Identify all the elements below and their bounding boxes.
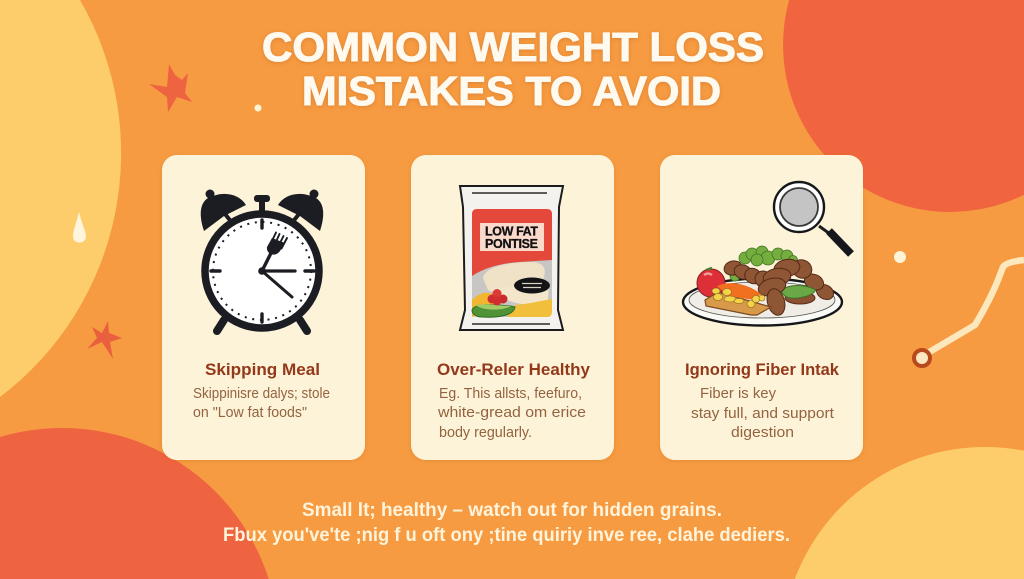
panel: over-relying on healthy foods xyxy=(411,155,614,460)
card background xyxy=(660,155,863,460)
decorative circle: bottom left xyxy=(0,428,269,579)
footer text xyxy=(223,500,790,546)
footer text: Fbux you've'te ;nig f u oft ony ;tine quiriy inve ree, clahe dediers. xyxy=(223,525,790,546)
card body text: Eg. This allsts, feefuro, xyxy=(439,385,582,402)
card heading: Skipping Meal xyxy=(205,361,320,379)
title: MISTAKES TO AVOID xyxy=(302,68,721,114)
icon: plate of food xyxy=(683,246,842,326)
card body text: digestion xyxy=(731,424,794,441)
card body text: Fiber is key xyxy=(700,385,776,402)
card heading: Over-Reler Healthy xyxy=(437,361,591,379)
card background xyxy=(162,155,365,460)
decorative drop xyxy=(73,212,86,243)
card body text: body regularly. xyxy=(439,424,532,441)
card background xyxy=(411,155,614,460)
panel: ignoring fiber intake xyxy=(660,155,863,460)
icon: alarm clock with fork xyxy=(201,190,323,331)
card heading: Ignoring Fiber Intak xyxy=(685,361,840,379)
card body text: stay full, and support xyxy=(691,405,835,422)
card body text xyxy=(691,385,835,441)
footer text: Small lt; healthy – watch out for hidden grains. xyxy=(302,500,722,521)
icon: low fat package: LOW FAT xyxy=(485,224,538,238)
decorative circle: top left xyxy=(0,0,121,397)
decorative star: upper xyxy=(149,64,192,112)
icon: low fat package xyxy=(460,186,563,330)
title xyxy=(262,24,764,114)
decorative line with ring xyxy=(914,260,1024,366)
panel: skipping meals xyxy=(162,155,365,460)
card body text xyxy=(437,385,586,441)
decorative dot: near title xyxy=(254,104,262,112)
decorative circle: top right xyxy=(783,0,1024,212)
icon: low fat package: PONTISE xyxy=(485,237,538,251)
card body text: Skippinisre dalys; stole xyxy=(193,386,330,402)
icon: magnifying glass xyxy=(774,182,851,254)
decorative star: lower xyxy=(87,321,122,359)
card body text: white-gread om erice xyxy=(437,404,586,421)
decorative circle: bottom right xyxy=(795,447,1024,579)
title: COMMON WEIGHT LOSS xyxy=(262,24,764,70)
card body text xyxy=(193,386,330,421)
card body text: on "Low fat foods" xyxy=(193,405,307,421)
decorative dot: right xyxy=(894,251,906,263)
